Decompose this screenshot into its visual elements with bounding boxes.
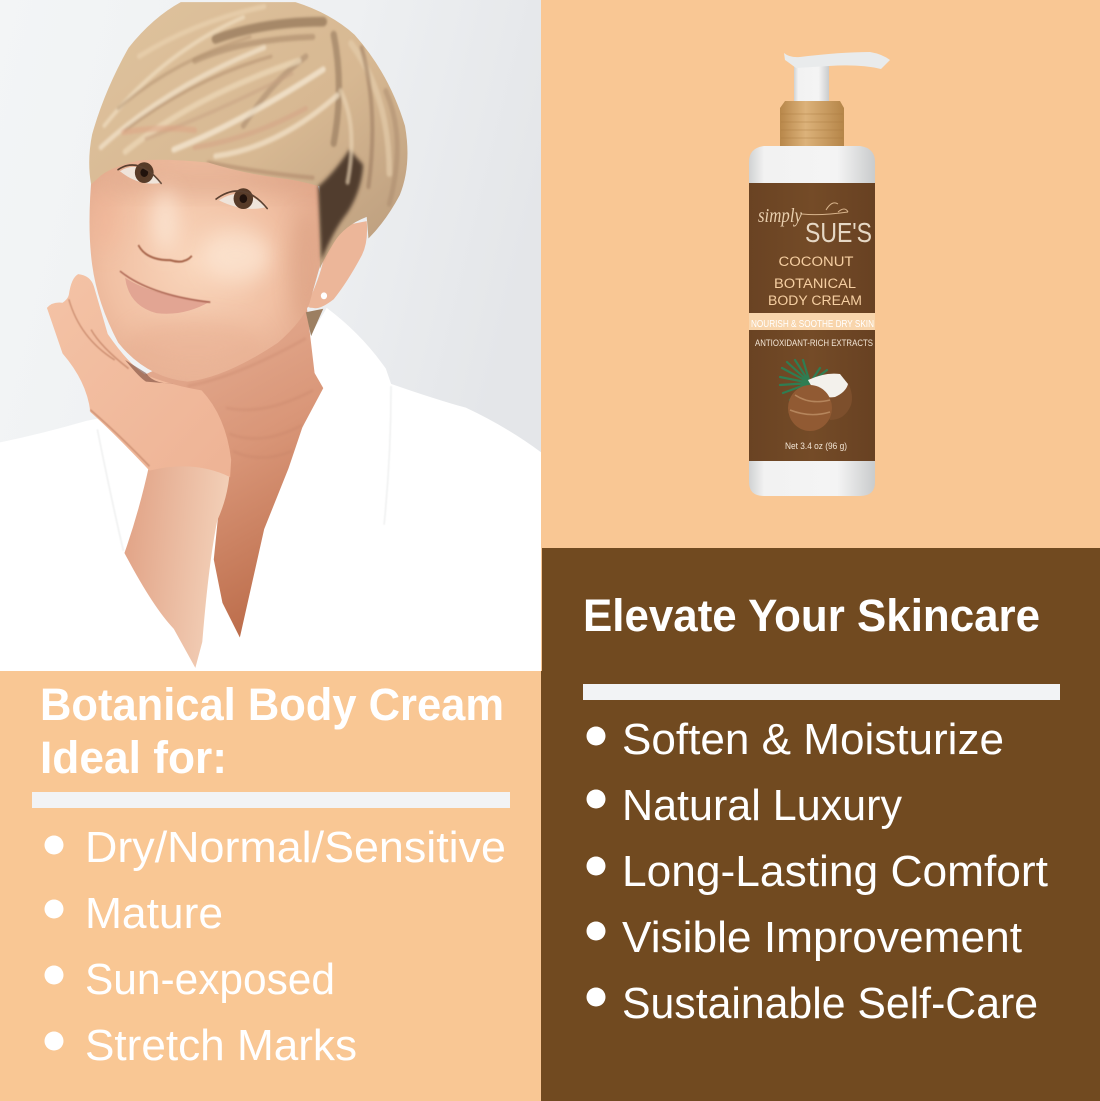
lips <box>120 271 210 314</box>
hair strands <box>101 7 397 204</box>
strip: brown edge beside the left panel <box>541 671 542 1101</box>
nose <box>138 191 192 262</box>
list: benefits <box>586 715 1048 1028</box>
list: ideal for skin types <box>44 823 506 1070</box>
ear <box>307 221 367 308</box>
product: coconut body cream pump bottle <box>749 52 890 496</box>
hair shadow <box>318 150 363 260</box>
brand logo: simply <box>758 205 802 227</box>
net weight: Net 3.4 oz (96 g) <box>785 441 847 451</box>
heading: Elevate Your Skincare: Elevate Your Skincare <box>583 590 1040 641</box>
item: Mature: Mature <box>85 889 223 938</box>
brand logo <box>758 203 872 248</box>
item: Sustainable Self-Care: Sustainable Self-Care <box>622 979 1038 1028</box>
item: Stretch Marks: Stretch Marks <box>85 1021 357 1070</box>
pump spout <box>784 52 890 69</box>
claim text: ANTIOXIDANT-RICH EXTRACTS <box>755 338 873 349</box>
finger and knuckle creases <box>69 299 149 466</box>
item: Visible Improvement: Visible Improvement <box>622 913 1022 962</box>
item: Natural Luxury: Natural Luxury <box>622 781 902 830</box>
peach label band <box>749 313 875 330</box>
heading: Botanical Body Cream Ideal for: Ideal for: <box>40 732 227 783</box>
robe <box>0 308 542 672</box>
neck and chest <box>139 299 323 638</box>
product name <box>768 254 862 308</box>
heading: Botanical Body Cream Ideal for <box>40 679 504 783</box>
brown label <box>749 183 875 461</box>
product name: BODY CREAM <box>768 293 862 308</box>
item: Soften and Moisturize: Soften & Moisturize <box>622 715 1004 764</box>
left eye <box>117 162 162 184</box>
item: Long-Lasting Comfort: Long-Lasting Comfort <box>622 847 1048 896</box>
pump stem <box>794 60 829 102</box>
divider bar left <box>32 792 510 808</box>
face <box>90 143 323 382</box>
face shading <box>92 171 323 373</box>
icon: coconut with palm leaf <box>780 360 852 431</box>
item: Dry/Normal/Sensitive: Dry/Normal/Sensitive <box>85 823 506 872</box>
right eye <box>216 188 268 209</box>
photo: smiling woman in white robe <box>0 0 542 672</box>
earring <box>321 292 327 299</box>
hand <box>47 274 231 477</box>
neck wrinkle shading <box>188 338 313 458</box>
product name: COCONUT <box>778 254 854 269</box>
panel: brown benefits <box>542 548 1100 1101</box>
product name: BOTANICAL <box>774 276 857 291</box>
band text: NOURISH & SOOTHE DRY SKIN <box>751 318 874 330</box>
heading: Botanical Body Cream Ideal for: Botanical Body Cream <box>40 679 504 730</box>
brand logo: SUE'S <box>805 217 872 248</box>
forearm <box>124 455 230 668</box>
divider bar right <box>583 684 1060 700</box>
hair <box>89 2 407 269</box>
hair back <box>306 309 323 336</box>
bottle body <box>749 146 875 496</box>
bamboo collar <box>780 101 844 146</box>
item: Sun-exposed: Sun-exposed <box>85 955 335 1004</box>
